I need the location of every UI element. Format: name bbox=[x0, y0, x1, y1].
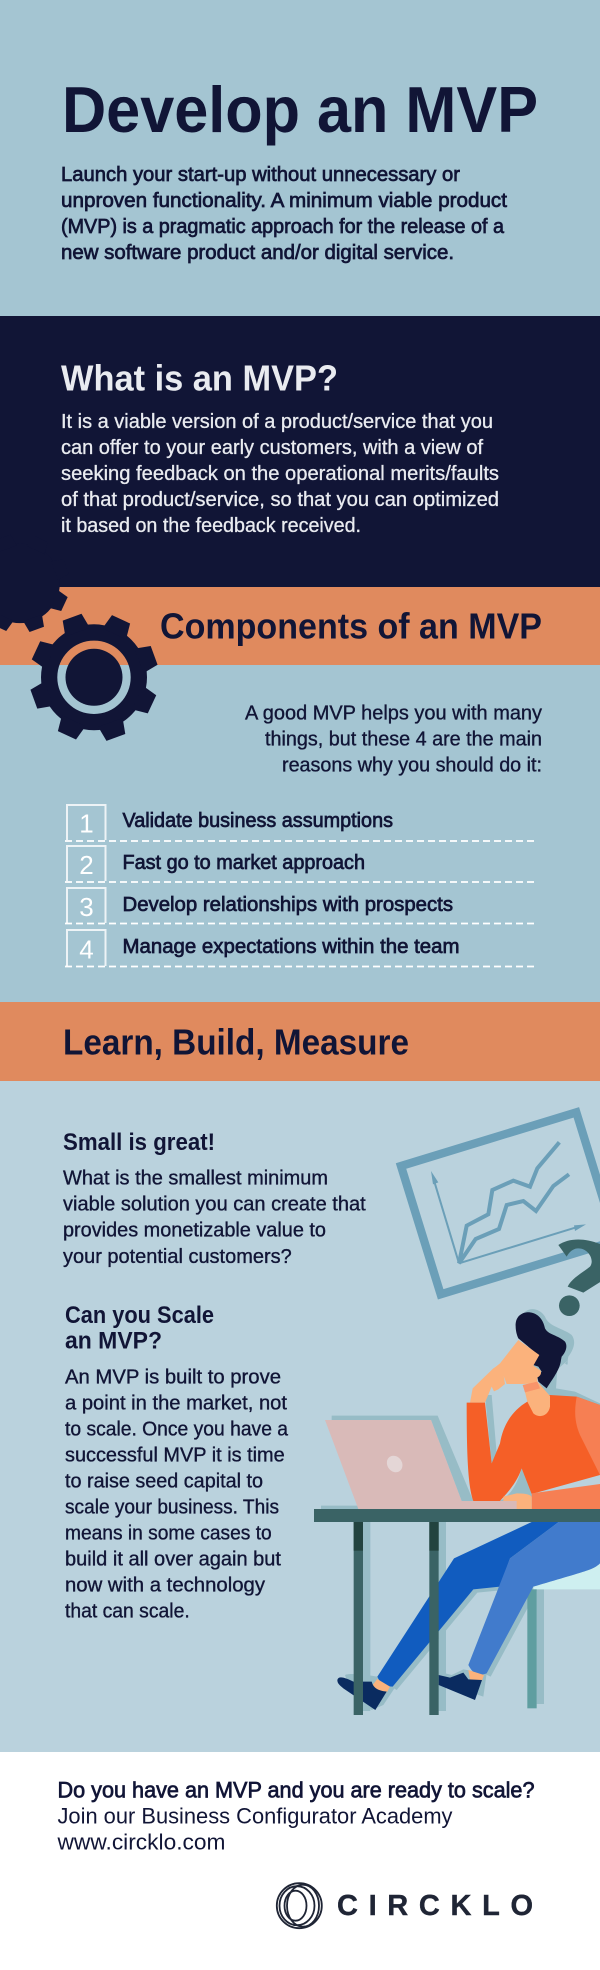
intro paragraph: Launch your start-up without unnecessary or bbox=[61, 164, 460, 186]
heading: small is great: Small is great! bbox=[63, 1129, 215, 1156]
list item 2: Fast go to market approach bbox=[122, 852, 365, 874]
intro paragraph bbox=[61, 164, 507, 264]
panel: what is an MVP bbox=[0, 316, 600, 587]
chair bbox=[533, 1563, 600, 1589]
small is great paragraph: provides monetizable value to bbox=[63, 1220, 326, 1242]
list item 3: 3 bbox=[79, 892, 94, 922]
components paragraph: A good MVP helps you with many bbox=[245, 702, 542, 724]
list item 4: Manage expectations within the team bbox=[122, 936, 459, 958]
front leg bbox=[468, 1522, 600, 1675]
footer call to action bbox=[56, 1778, 535, 1854]
panel: footer bbox=[0, 1752, 600, 1970]
panel: learn build measure banner bbox=[0, 1002, 600, 1081]
footer call to action: Join our Business Configurator Academy bbox=[58, 1804, 452, 1828]
heading: what is an MVP: What is an MVP? bbox=[61, 358, 338, 398]
what is an MVP paragraph: can offer to your early customers, with a view of bbox=[61, 437, 483, 459]
list item 1 bbox=[65, 805, 535, 841]
small is great paragraph bbox=[63, 1168, 366, 1268]
components paragraph bbox=[245, 702, 542, 776]
small is great paragraph: your potential customers? bbox=[63, 1246, 292, 1268]
list item 3 bbox=[65, 888, 535, 924]
hair shadow, body and head bbox=[492, 1309, 600, 1420]
components paragraph: things, but these 4 are the main bbox=[265, 728, 542, 750]
panel: learn build measure body bbox=[0, 1081, 600, 1752]
heading: learn build measure: Learn, Build, Measure bbox=[63, 1022, 409, 1062]
can you scale paragraph: to raise seed capital to bbox=[65, 1470, 263, 1492]
can you scale paragraph: that can scale. bbox=[65, 1600, 190, 1622]
icon: large gear bbox=[29, 613, 159, 742]
heading: can you scale an MVP: an MVP? bbox=[65, 1328, 162, 1355]
components paragraph: reasons why you should do it: bbox=[282, 754, 542, 776]
lower body, chair and desk bbox=[321, 1416, 600, 1711]
heading: can you scale an MVP bbox=[65, 1302, 214, 1355]
list item 4 bbox=[65, 930, 535, 966]
illustration: chart on frame bbox=[401, 1112, 600, 1294]
list item 4: 4 bbox=[79, 934, 94, 964]
logo wordmark: CIRCKLO bbox=[337, 1890, 533, 1922]
can you scale paragraph: An MVP is built to prove bbox=[65, 1366, 281, 1388]
what is an MVP paragraph: seeking feedback on the operational merits/faults bbox=[61, 463, 499, 485]
torso and arms bbox=[467, 1363, 600, 1510]
heading: can you scale an MVP: Can you Scale bbox=[65, 1302, 214, 1329]
list item 3: Develop relationships with prospects bbox=[122, 894, 453, 916]
panel: components bbox=[0, 587, 600, 1002]
title: Develop an MVP bbox=[62, 73, 538, 146]
list item 1: Validate business assumptions bbox=[122, 810, 393, 832]
panel: intro bbox=[0, 0, 600, 316]
can you scale paragraph: means in some cases to bbox=[65, 1522, 272, 1544]
can you scale paragraph: to scale. Once you have a bbox=[65, 1418, 289, 1440]
small is great paragraph: viable solution you can create that bbox=[63, 1194, 366, 1216]
can you scale paragraph: build it all over again but bbox=[65, 1548, 281, 1570]
logo mark bbox=[277, 1883, 322, 1928]
can you scale paragraph: successful MVP it is time bbox=[65, 1444, 285, 1466]
what is an MVP paragraph bbox=[61, 411, 499, 537]
can you scale paragraph: scale your business. This bbox=[65, 1496, 279, 1518]
desk bbox=[314, 1509, 600, 1715]
what is an MVP paragraph: it based on the feedback received. bbox=[61, 515, 361, 537]
can you scale paragraph: now with a technology bbox=[65, 1574, 265, 1596]
logo: circklo bbox=[277, 1883, 533, 1928]
small is great paragraph: What is the smallest minimum bbox=[63, 1168, 328, 1190]
back leg bbox=[377, 1522, 559, 1687]
list item 1: 1 bbox=[79, 808, 94, 838]
footer call to action: Do you have an MVP and you are ready to scale? bbox=[58, 1778, 534, 1802]
heading: components of an MVP: Components of an MVP bbox=[160, 606, 542, 646]
shadows bbox=[321, 1416, 600, 1711]
what is an MVP paragraph: of that product/service, so that you can optimized bbox=[61, 489, 499, 511]
list item 2: 2 bbox=[79, 850, 94, 880]
list: reasons bbox=[65, 805, 535, 966]
illustration: question mark bbox=[558, 1239, 600, 1316]
footer call to action: www.circklo.com bbox=[56, 1830, 226, 1854]
intro paragraph: (MVP) is a pragmatic approach for the release of a bbox=[61, 216, 505, 238]
intro paragraph: new software product and/or digital service. bbox=[61, 242, 454, 264]
can you scale paragraph: a point in the market, not bbox=[65, 1392, 287, 1414]
intro paragraph: unproven functionality. A minimum viable product bbox=[61, 190, 507, 212]
illustration: person at laptop bbox=[314, 1309, 600, 1715]
icon: small gear bbox=[0, 534, 69, 633]
laptop bbox=[325, 1420, 517, 1509]
can you scale paragraph bbox=[65, 1366, 289, 1622]
list item 2 bbox=[65, 846, 535, 882]
what is an MVP paragraph: It is a viable version of a product/service that you bbox=[61, 411, 493, 433]
shoes bbox=[373, 1670, 484, 1692]
